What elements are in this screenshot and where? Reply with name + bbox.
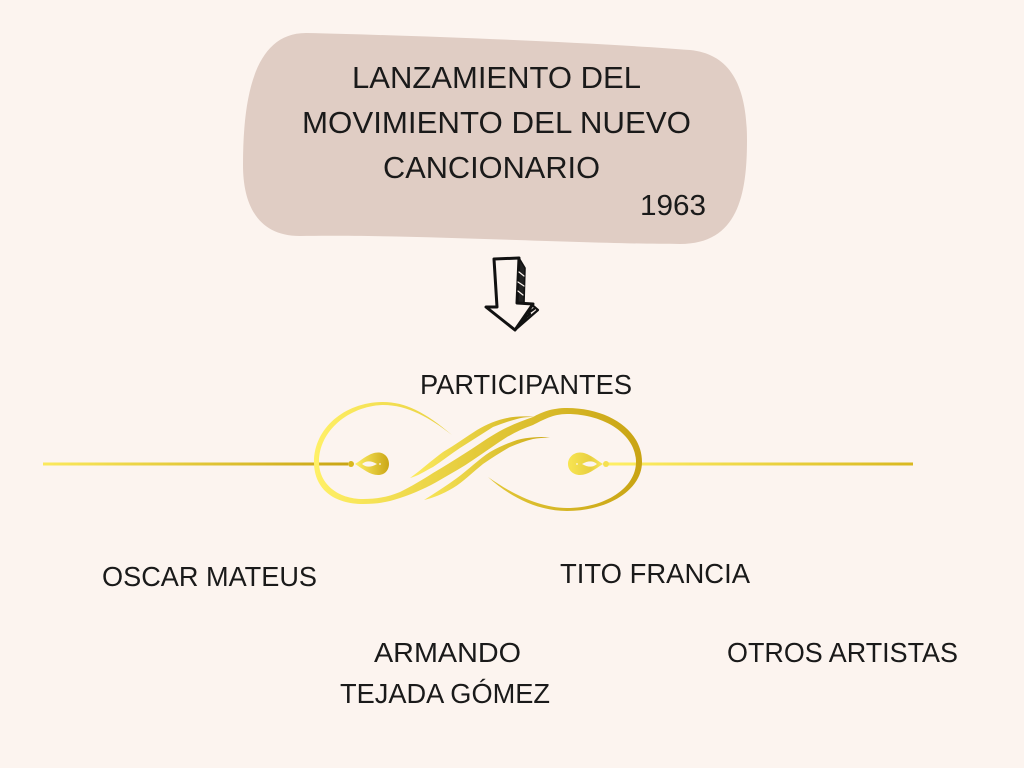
participant: Armando Tejada Gómez: TEJADA GÓMEZ bbox=[340, 678, 550, 709]
title: CANCIONARIO bbox=[383, 150, 600, 185]
right drop bbox=[568, 452, 609, 475]
title panel bbox=[243, 33, 747, 244]
participant: Oscar Mateus: OSCAR MATEUS bbox=[102, 561, 317, 592]
left line bbox=[43, 462, 348, 466]
title bbox=[302, 60, 691, 185]
ornamental divider bbox=[43, 402, 913, 511]
icon: hand-drawn down arrow bbox=[486, 258, 538, 330]
heading: participantes: PARTICIPANTES bbox=[420, 369, 632, 400]
participant: Otros Artistas: OTROS ARTISTAS bbox=[727, 637, 958, 668]
participant: Tito Francia: TITO FRANCIA bbox=[560, 558, 750, 589]
right line bbox=[606, 462, 913, 466]
title: LANZAMIENTO DEL bbox=[352, 60, 641, 95]
title: MOVIMIENTO DEL NUEVO bbox=[302, 105, 691, 140]
year: 1963 bbox=[640, 190, 706, 222]
flourish inner strand top bbox=[410, 416, 535, 478]
title blob bbox=[243, 33, 747, 244]
left drop bbox=[348, 452, 389, 475]
participant: Armando Tejada Gómez bbox=[340, 637, 550, 709]
participant: Armando Tejada Gómez: ARMANDO bbox=[374, 637, 521, 668]
flourish inner strand bottom bbox=[424, 437, 550, 500]
infinity flourish bbox=[314, 402, 642, 511]
